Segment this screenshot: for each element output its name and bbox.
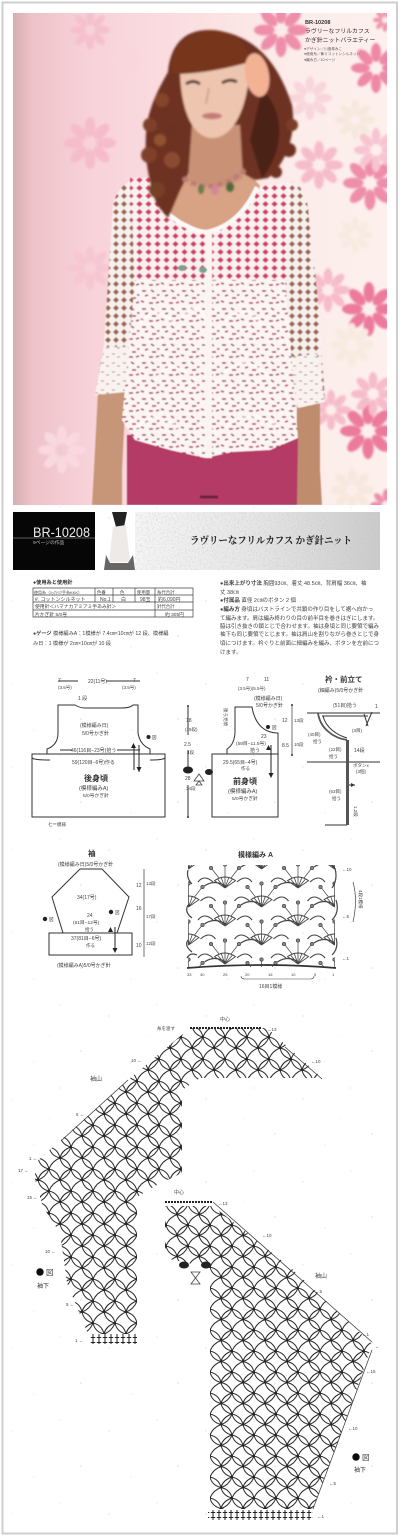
cardigan lower lace [122,280,298,458]
chart: figure 3 sleeve lattice: ←1 [317,1514,324,1519]
materials table: 使用量 [137,589,151,596]
face [180,62,250,138]
mouse and weight icons [179,1262,189,1268]
cuffs [95,347,131,395]
schematic: sleeve: 図 [115,910,120,916]
arms and hands [92,390,126,505]
photo caption [304,20,375,62]
chart: figure 4 sleeve lattice: 袖下 [37,1282,49,1290]
photo caption: ●デザイン／川島希みこ [304,46,342,51]
schematic: length dimensions [183,705,213,818]
schematic: sleeve: 37(81目−6号) [71,936,101,942]
wall background [13,13,387,505]
schematic: front body: 後ろ見頃 [222,708,229,726]
finished size and method: けます。 [220,649,241,656]
buttons [178,265,186,271]
sleeve labels: 袖 [88,848,96,858]
schematic: front body: (模様編みA) [228,787,258,795]
schematic: front body: 11 [264,677,269,683]
schematic: collar and front band: (63目) [329,789,342,795]
materials table: #. コットンシルネット [35,597,86,603]
chart: pattern A: ←1 [342,956,350,961]
chart: figure 3 sleeve lattice: 袖下 [354,1466,366,1474]
chart: pattern A: 1 [332,972,335,977]
schematic: sleeve [43,848,156,969]
schematic: sleeve: 拾う [85,926,94,933]
chart: pattern A: 25 [223,972,228,977]
schematic: collar and front band: 拾う [313,738,322,745]
photo caption: ラヴリーなフリルカフス [305,27,370,35]
band title: ラヴリーなフリルカフス かぎ針ニット [190,534,352,547]
schematic: sleeve: 13段 [146,880,156,887]
schematic: back body: 後身頃 [84,773,108,783]
schematic: collar and front band: 拾う [329,753,338,760]
schematic: front body: 5/0号かぎ針 [256,702,283,709]
schematic: back body: (模様編み日) [80,722,109,729]
necklace [183,170,245,186]
pants [127,435,298,505]
chart: figure 4 sleeve lattice: 5 ← [76,1112,84,1117]
chart: figure 4 sleeve lattice: 5 ← [66,1302,74,1307]
schematic: front body: 8.5 [282,743,289,749]
materials table [33,588,193,618]
schematic: back body: 46(116目−23号)拾う [71,747,116,754]
gauge note: ●ゲージ 模様編みA：1模様が 7.4㎝×10㎝が 12 段、模様編 [33,629,168,637]
materials table: 約6,090円 [158,596,181,603]
cardigan upper mesh [130,178,292,282]
materials table: No.1 [100,597,111,603]
schematic: front body: 拾う [250,747,260,754]
schematic: back body: 59(120目−6号)作る [72,759,115,766]
schematic: back body: (模様編みA) [79,784,109,792]
schematic: collar and front band: 1.2段 [352,806,359,817]
chart: figure 3 sleeve lattice: 図 [362,1453,370,1462]
schematic: length dimensions: 34段 [186,785,196,792]
schematic: front body: (3.5号)(5.5号) [238,686,266,692]
chart: figure 3 sleeve lattice: 袖山 [315,1272,327,1280]
chart: figure 4 sleeve lattice: 10 ← [45,1249,56,1254]
schematic: front body: (58目−11.5号) [236,741,266,747]
schematic: collar and front band: (3個) [356,768,367,775]
schematic: length dimensions: (19段) [185,726,198,733]
schematic: collar and front band [307,674,380,825]
materials table: 98玉 [140,597,151,603]
chart labels: 中心 [220,1016,230,1023]
header band [13,512,380,570]
flower hair ornament [244,52,272,99]
finished size and method: 脇は引き抜きの鎖とじで合わせます。袖は身頃と同じ要領で編み [220,622,379,630]
hair and face [141,30,298,218]
grey speckle title band [135,512,380,570]
schematic: collar and front band: (51目)拾う [333,702,357,709]
finished size and method [220,579,379,656]
page note: 9ページの作品 [33,539,65,546]
schematic: sleeve: 12段 [146,940,156,947]
neck [188,125,243,187]
materials table: 色番 [97,589,106,596]
chart: figure 4 sleeve lattice: 1 ← [29,1156,37,1161]
hair mass [146,30,293,218]
finished size and method: 袖下も同じ要領でとじます。袖は肩山を割りながら巻きとじで身 [220,630,379,638]
schematic: front body [212,677,304,817]
photo caption: かぎ針ニットバラエティー [305,36,375,44]
left sleeve [98,180,135,395]
schematic: collar and front band: ボタンx [353,762,369,769]
chart: figure 3 sleeve lattice: ←5 [315,1289,322,1294]
chart: figure 3 sleeve lattice: ← [375,1344,380,1349]
schematic: back body: (3.5号) [58,685,72,691]
schematic: front body: 12 [282,718,288,724]
small mouse icons [183,766,193,774]
chart: figure 4 sleeve lattice: 15 ← [27,1195,38,1200]
schematic: front body: 作る [241,765,250,772]
chart: pattern A: 30 [200,972,205,977]
schematic: collar and front band: 14段 [354,747,365,754]
finished size and method: 丈 38㎝ [220,588,239,596]
photo caption: ●使用糸／黄ミコットンシルネット [304,51,360,56]
schematic: sleeve: 17段 [146,913,156,920]
materials heading: ●使用糸と使用針 [33,578,73,586]
schematic: sleeve: (模様編み日)5/0号かぎ針 [58,861,113,868]
chart: figure 3 sleeve lattice [160,1189,380,1520]
schematic: sleeve: (模様編みA)5/0号かぎ針 [57,962,111,969]
schematic: back body [32,678,165,828]
schematic: sleeve: 24 [87,913,93,919]
chart: figure 3 sleeve lattice: ←10 [348,1426,358,1431]
chart: figure 4 sleeve lattice [18,1016,325,1344]
finished size and method: ●編み方 身頃はバストラインで共鎖の作り目をして裾へ向かっ [220,605,373,613]
black code box [13,512,95,570]
chart: figure 3 sleeve lattice: ←15 [366,1369,376,1374]
schematic: front body: 13段 [294,717,304,724]
code: BR-10208 [33,525,90,540]
schematic: back body: 5/0号かぎ針 [82,730,109,737]
wallpaper flowers [38,3,400,521]
chart: figure 4 sleeve lattice: 図 [46,1268,54,1277]
front bands and neckline [167,187,257,232]
chart: figure 4 sleeve lattice: 1 ← [75,1338,83,1343]
chart: figure 4 sleeve lattice: 17 ← [18,1168,29,1173]
figure 3 label [352,1453,360,1461]
right sleeve [284,182,326,408]
chart: figure 4 sleeve lattice: 糸を渡す [157,1025,175,1032]
schematic: back body: (3.5号) [122,685,136,691]
schematic: length dimensions: 28 [185,776,191,782]
lace scallop fans [135,308,280,430]
finished size and method: て編みます。肩は編み終わりの目の前半目を巻きはぎにします。 [220,614,378,622]
chest skin [170,172,261,230]
chart: figure 3 sleeve lattice: ←10 [262,1233,272,1238]
chart: pattern A [187,850,364,990]
finished size and method: ●付属品 直径 2㎝のボタン 2 個 [220,596,297,604]
gauge note: み日：1 模様が 2㎝×10㎝が 10 段 [33,639,112,647]
chart: pattern A: 5 [314,972,317,977]
front body labels: 7 [246,677,249,683]
curls on the right [286,119,298,131]
materials table and notes [33,578,379,656]
schematic: back body: 22(11号) [88,679,107,685]
materials table: 使用糸（ﾊｯﾅﾃﾐｱ手糸KKK） [34,589,82,595]
chart: pattern A: 16目1模様 [259,983,282,990]
schematic: sleeve: 図 [49,917,54,923]
schematic: collar and front band: 拾う [332,795,341,802]
schematic: collar and front band: (22目) [329,747,342,753]
schematic: front body: 29.5(65目−4号) [223,760,258,766]
collar labels: 衿・前立て [325,674,362,684]
materials table: 使用針＜ハマナカアミアミ手あみ針＞ [35,603,117,610]
materials table: 糸代合計 [157,589,175,596]
schematic: front body: 図 [272,725,277,731]
materials table: 色 [120,589,125,595]
schematic: length dimensions: 2.5 [184,742,191,748]
chart: pattern A: 模様編み A [238,850,273,859]
chart: figure 4 sleeve lattice: 10 ← [131,1058,142,1063]
chart: figure 3 sleeve lattice: →13 [218,1201,228,1206]
schematic: length dimensions: 18 [186,718,192,724]
schematic: back body: 5/0号かぎ針 [83,792,109,799]
fringe [172,30,250,74]
schematic: back body: 図 [152,735,157,741]
chart: pattern A: 4段1模様 [357,890,364,909]
schematic: back body: 七＝模様 [48,821,66,828]
photo caption: ●編み方／10ページ [304,57,336,62]
row and stitch numbers: ←10 [342,867,352,872]
materials table: 針代合計 [157,603,175,610]
schematic: sleeve: 10 [136,943,142,949]
schematic: sleeve: (61目−12号) [73,920,100,926]
chart: figure 4 sleeve lattice: 袖山 [90,1075,102,1083]
schematic: front body: (模様編み日) [254,695,283,702]
photo caption: BR-10208 [305,20,330,26]
schematic: length dimensions: 4段 [187,749,195,756]
photo: model wearing the crochet cardigan [13,3,400,521]
figure 4 label [36,1268,44,1276]
chart: figure 4 sleeve lattice: →13 [267,1027,277,1032]
schematic: collar and front band: 1 [375,704,378,710]
schematic: front body: 5/0号かぎ針 [232,795,258,802]
chart: figure 3 sleeve lattice: ←5 [329,1481,336,1486]
chart: figure 4 sleeve lattice: ←10 [311,1059,321,1064]
model figure [92,172,326,505]
materials table: 白 [121,596,126,603]
chart: pattern A: ←5 [342,914,350,919]
eyes and lips [186,80,237,84]
schematic: sleeve: 16 [136,906,142,912]
finished size and method: ●出来上がり寸法 胸囲93㎝、着丈 48.5㎝、背肩幅 36㎝、袖 [220,579,367,587]
materials table: 約 305円 [165,611,184,618]
back body labels: 7 [58,678,61,684]
schematic: back body: 1 段 [78,695,87,702]
chart: pattern A: 33 [187,972,192,977]
schematic: sleeve: 34(17号) [77,895,97,901]
materials table: 片かぎ針 5/0号 [35,611,67,618]
schematic: sleeve: 作る [86,942,95,949]
chart: pattern A: 10 [291,972,296,977]
schematic: back body: 7 [133,678,136,684]
schematic: front body: 10段 [294,741,304,748]
finished size and method: 頃につけます。衿ぐりと前面に細編みを編み、ボタンを左前につ [220,639,379,647]
schematic: sleeve: 12 [136,883,142,889]
chart: pattern A: 15 [268,972,273,977]
schematic: collar and front band: (3目) [352,728,363,734]
chart labels: 中心 [174,1189,184,1196]
gauge note [33,629,168,647]
schematic: front body: 23 [261,734,267,740]
schematic: front body: 前身頃 [233,776,257,786]
thumbnail photo [104,512,135,570]
stitch diagram [188,865,335,967]
schematic: collar and front band: (40目) [308,732,321,738]
schematic: collar and front band: (細編み)5/0号かぎ針 [318,687,363,694]
chart: figure 3 sleeve lattice: ←1 [362,1332,370,1337]
chart: pattern A: 20 [245,972,250,977]
